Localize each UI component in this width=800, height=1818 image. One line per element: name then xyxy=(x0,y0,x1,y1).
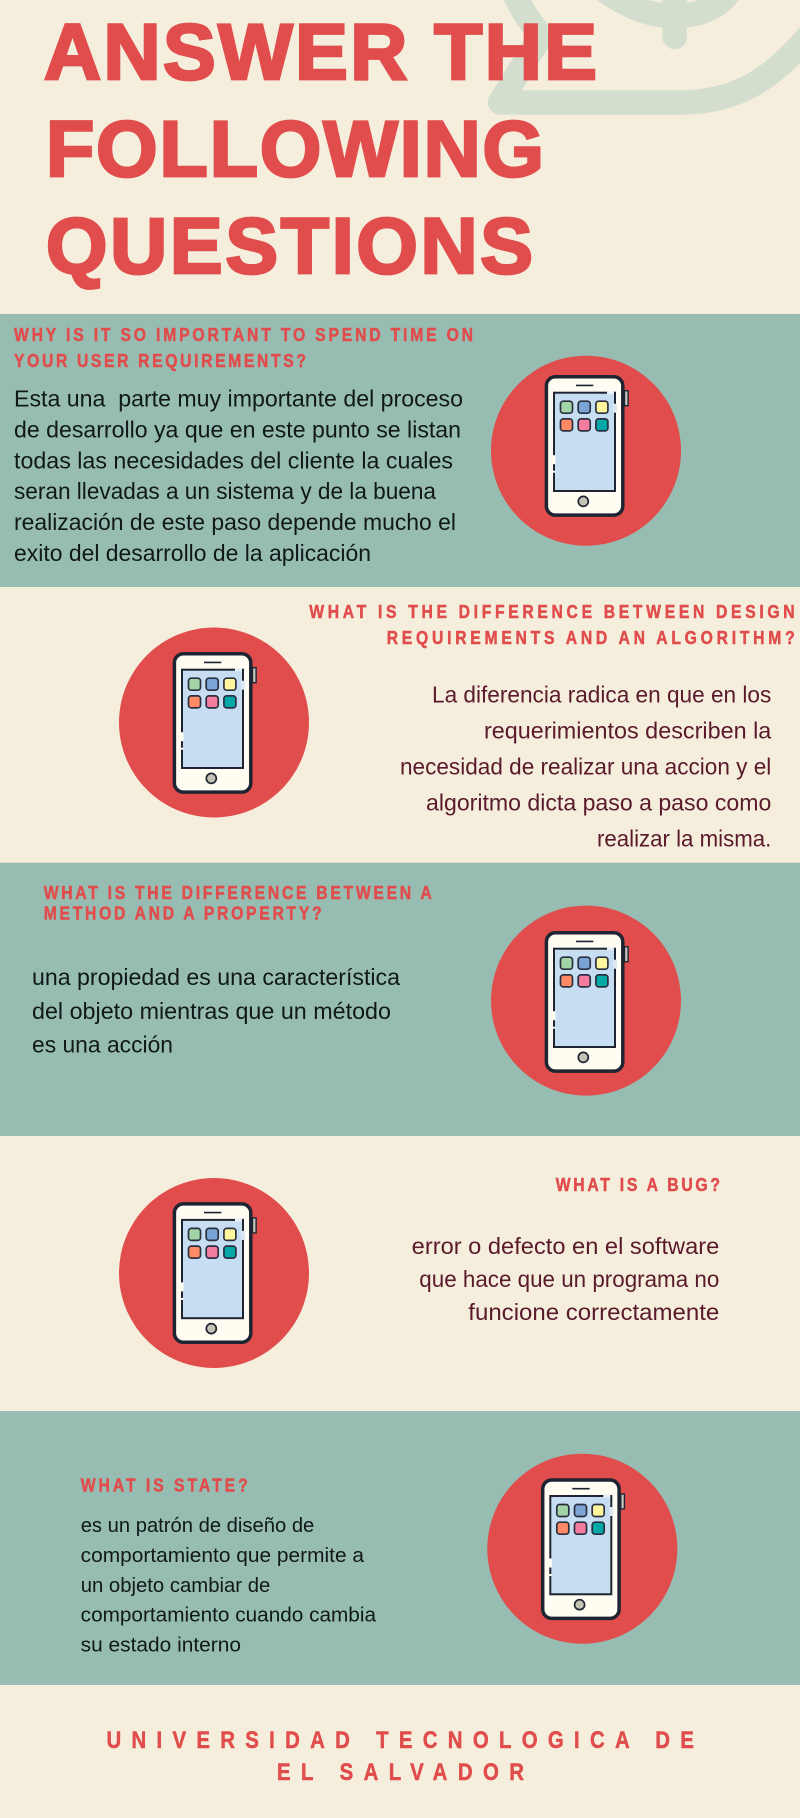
text block: method vs property answer xyxy=(32,964,400,1058)
panel: method vs property xyxy=(0,863,800,1136)
decorative line art: top right xyxy=(500,0,800,102)
panel: design requirements vs algorithm xyxy=(0,587,800,863)
text block: method vs property answer: una propiedad es una característica xyxy=(32,964,400,990)
text block: state answer: comportamiento que permite a xyxy=(81,1544,365,1567)
text block: user requirements answer: de desarrollo ya que en este punto se listan xyxy=(14,416,461,442)
text block: state answer xyxy=(81,1514,377,1657)
icon: smartphone in red circle xyxy=(491,356,681,546)
panel: what is state xyxy=(0,1411,800,1685)
icon: smartphone in red circle xyxy=(491,906,681,1096)
text block: user requirements answer: seran llevadas a un sistema y de la buena xyxy=(14,478,436,504)
footer: university name xyxy=(106,1726,694,1785)
text block: bug answer: funcione correctamente xyxy=(468,1299,719,1325)
icon: smartphone in red circle xyxy=(119,628,309,818)
panel background xyxy=(0,1411,800,1685)
text block: design requirements answer: requerimientos describen la xyxy=(484,718,772,744)
text block: method vs property answer: es una acción xyxy=(32,1032,173,1058)
panel: what is a bug xyxy=(0,1136,800,1411)
title: FOLLOWING xyxy=(46,104,544,193)
icon: smartphone in red circle xyxy=(487,1454,677,1644)
text block: user requirements answer xyxy=(14,386,463,566)
text block: design requirements answer: algoritmo dicta paso a paso como xyxy=(426,790,771,816)
text block: design requirements answer xyxy=(400,682,772,852)
title: QUESTIONS xyxy=(46,201,533,290)
heading: user requirements xyxy=(14,324,473,371)
heading: design requirements vs algorithm: REQUIREMENTS AND AN ALGORITHM? xyxy=(387,627,795,648)
panel: user requirements xyxy=(0,314,800,587)
heading: user requirements: WHY IS IT SO IMPORTANT TO SPEND TIME ON xyxy=(14,324,473,345)
heading: what is a bug: WHAT IS A BUG? xyxy=(556,1174,720,1195)
panel background xyxy=(0,863,800,1136)
text block: state answer: su estado interno xyxy=(81,1634,241,1657)
text block: bug answer xyxy=(412,1233,719,1325)
text block: user requirements answer: realización de este paso depende mucho el xyxy=(14,509,456,535)
title xyxy=(44,7,597,290)
icon: smartphone in red circle xyxy=(119,1178,309,1368)
text block: user requirements answer: exito del desarrollo de la aplicación xyxy=(14,540,371,566)
heading: what is state: WHAT IS STATE? xyxy=(81,1474,248,1496)
text block: design requirements answer: La diferencia radica en que en los xyxy=(432,682,771,708)
text block: design requirements answer: realizar la misma. xyxy=(597,826,771,852)
panel background xyxy=(0,587,800,863)
text block: bug answer: que hace que un programa no xyxy=(419,1266,719,1292)
heading: user requirements: YOUR USER REQUIREMENTS? xyxy=(14,350,306,371)
footer: university name: EL SALVADOR xyxy=(277,1758,524,1785)
text block: state answer: es un patrón de diseño de xyxy=(81,1514,314,1537)
heading: method vs property: METHOD AND A PROPERTY? xyxy=(44,902,322,924)
heading: method vs property: WHAT IS THE DIFFERENCE BETWEEN A xyxy=(44,882,432,903)
text block: bug answer: error o defecto en el software xyxy=(412,1233,719,1259)
heading: design requirements vs algorithm: WHAT IS THE DIFFERENCE BETWEEN DESIGN xyxy=(309,601,795,622)
panel background xyxy=(0,1136,800,1411)
text block: state answer: comportamiento cuando cambia xyxy=(81,1604,377,1627)
text block: user requirements answer: Esta una parte muy importante del proceso xyxy=(14,386,463,412)
text block: design requirements answer: necesidad de realizar una accion y el xyxy=(400,754,771,780)
footer: university name: UNIVERSIDAD TECNOLOGICA DE xyxy=(106,1726,694,1753)
text block: method vs property answer: del objeto mientras que un método xyxy=(32,998,391,1024)
heading: method vs property xyxy=(44,882,432,924)
title: ANSWER THE xyxy=(44,7,597,96)
text block: user requirements answer: todas las necesidades del cliente la cuales xyxy=(14,447,453,473)
panel background xyxy=(0,314,800,587)
heading: design requirements vs algorithm xyxy=(309,601,795,648)
text block: state answer: un objeto cambiar de xyxy=(81,1574,270,1597)
